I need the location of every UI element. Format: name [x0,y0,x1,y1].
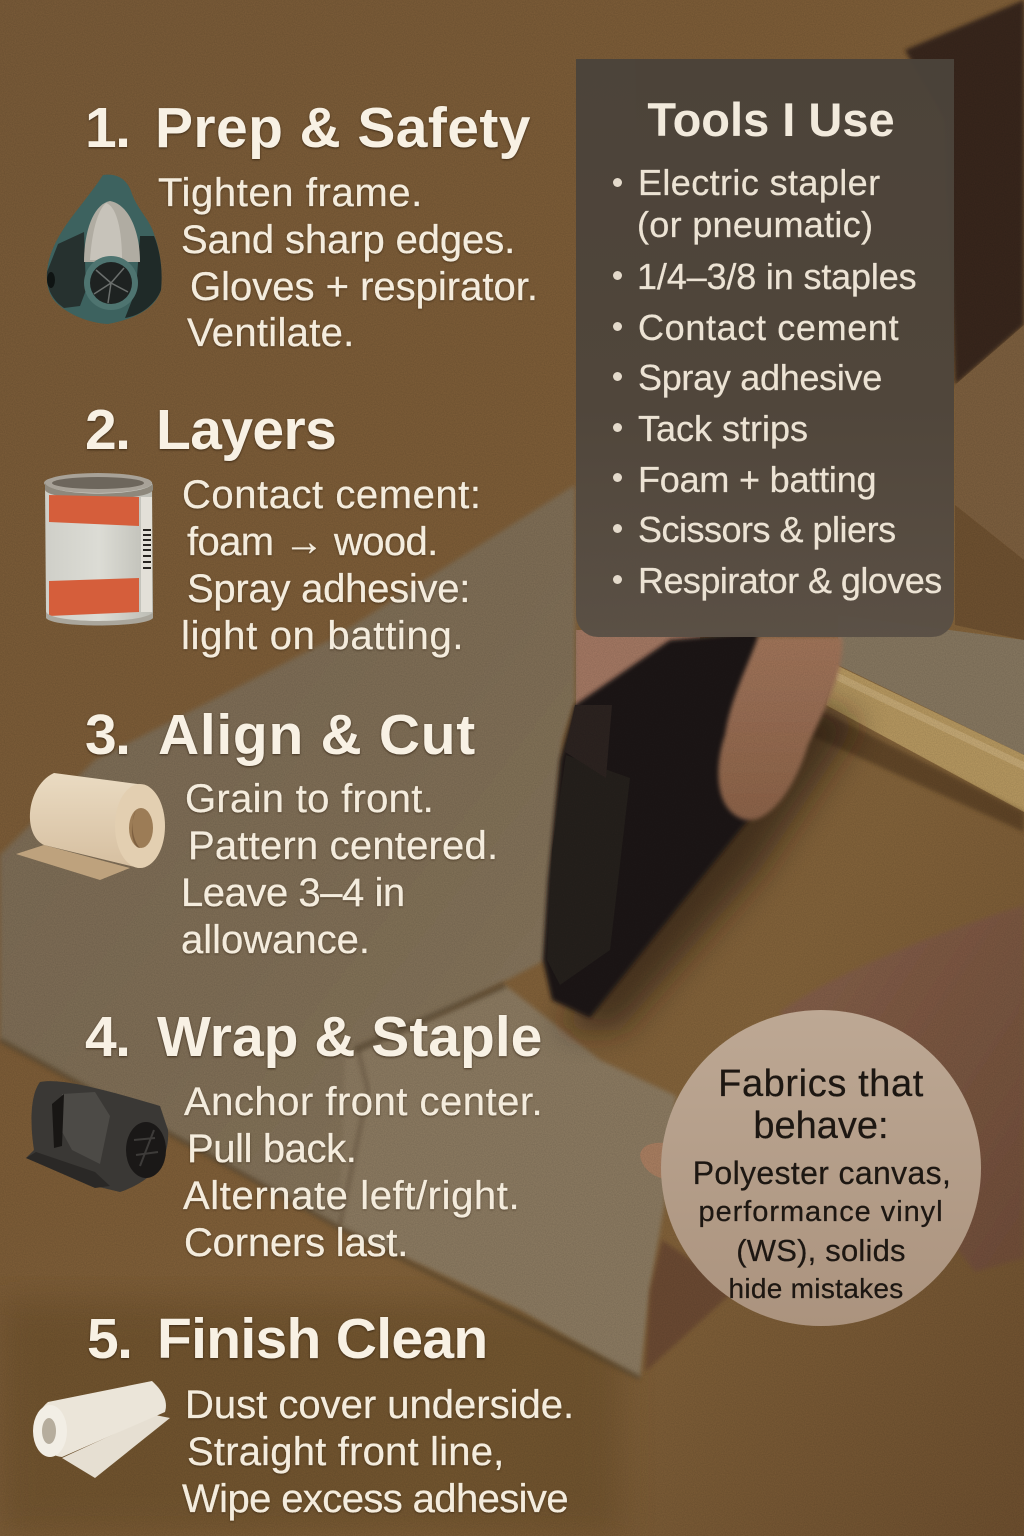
callout: fabrics that behave: (WS), solids [736,1233,906,1268]
text: Spray adhesive: [187,567,470,611]
text: Wrap & Staple [157,1005,542,1069]
right hand [780,905,1024,1272]
text: Alternate left/right. [183,1174,520,1218]
heading: step 5 [87,1307,487,1371]
icon: dust cover roll [33,1381,170,1478]
heading: step 1 [85,96,531,161]
text: step 5 [182,1383,574,1522]
lower fabric fold [340,985,676,1378]
list: tools: 1/4–3/8 in staples [637,256,916,297]
text: Tighten frame. [158,171,423,215]
text: Pull back. [187,1127,356,1171]
list: tools: Tack strips [638,408,808,449]
text: Pattern centered. [188,824,498,868]
text: Straight front line, [187,1430,504,1474]
text: light on batting. [181,614,464,658]
text: Prep & Safety [155,96,531,160]
text: 4. [85,1005,129,1069]
list: tools [613,162,942,601]
text: Leave 3–4 in [181,871,405,915]
main fabric sheet [0,485,575,1228]
heading: step 4 [84,1005,542,1070]
text: Align & Cut [158,703,476,767]
stapler [543,632,800,1018]
text: 5. [87,1307,131,1371]
icon: respirator mask [46,174,162,324]
callout: fabrics that behave [661,1010,981,1326]
arm behind stapler [576,630,700,720]
heading: tools: Tools I Use [647,93,895,146]
text: Layers [156,398,336,462]
text: Ventilate. [187,311,355,355]
callout: fabrics that behave: Polyester canvas, [693,1155,951,1191]
text: Sand sharp edges. [181,218,515,262]
callout: fabrics that behave: Fabrics that [718,1063,924,1105]
callout: fabrics that behave: hide mistakes [728,1273,904,1304]
text: step 1 [158,171,538,355]
icon: contact cement can [44,473,153,626]
thumb [718,637,842,820]
text: step 4 [182,1080,543,1265]
text: allowance. [181,918,370,962]
list: tools: Foam + batting [638,459,876,500]
text: foam → wood. [187,520,438,564]
list: tools: Spray adhesive [638,357,882,398]
text: Finish Clean [157,1307,487,1371]
list: tools: Electric stapler [638,162,880,203]
text: Dust cover underside. [185,1383,574,1427]
frame and fabric at back [838,615,1024,755]
left fingers [645,1240,735,1372]
callout: fabrics that behave: behave: [753,1105,889,1147]
text: 3. [85,703,129,767]
text: Wipe excess adhesive [182,1477,568,1521]
text: step 2 [181,473,482,660]
callout: fabrics that behave: performance vinyl [698,1196,944,1228]
heading: step 2 [85,398,336,463]
list: tools: Contact cement [638,307,899,348]
text: Gloves + respirator. [190,265,538,309]
text: Corners last. [184,1221,408,1265]
list: tools: (or pneumatic) [637,204,873,245]
list: tools: Respirator & gloves [638,560,942,601]
text: 2. [85,398,129,462]
icon: electric stapler [26,1081,168,1192]
heading: step 3 [85,703,476,768]
list: tools: Scissors & pliers [638,509,896,550]
text: Contact cement: [182,473,482,517]
text: 1. [85,96,129,160]
stapler shadow [560,690,860,1030]
icon: foam roll [16,773,165,880]
sleeve [905,0,1024,385]
text: step 3 [181,777,498,962]
text: Grain to front. [185,777,434,821]
text: Anchor front center. [184,1080,543,1124]
panel: tools list [576,59,954,637]
